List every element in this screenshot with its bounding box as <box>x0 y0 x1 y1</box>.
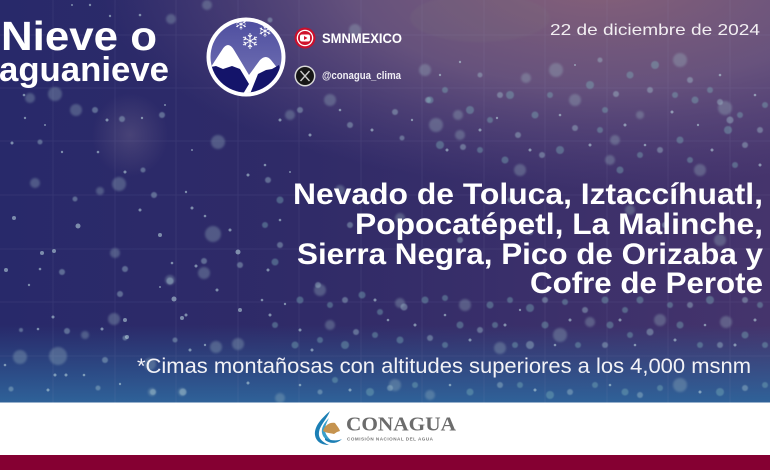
title: Nieve o <box>1 13 157 59</box>
social label: SMNMEXICO: SMNMEXICO <box>322 30 402 46</box>
footnote: *Cimas montañosas con altitudes superiores a los 4,000 msnm <box>137 355 751 378</box>
logo wordmark: CONAGUA: CONAGUA <box>346 414 457 436</box>
footer maroon band <box>0 455 770 470</box>
heading: mountain peaks: Sierra Negra, Pico de Orizaba y <box>297 238 764 271</box>
heading: mountain peaks <box>293 178 764 300</box>
snow: teal flakes on the right half <box>262 61 768 399</box>
icon: snowy mountain badge <box>206 18 286 96</box>
logo subtitle: COMISIÓN NACIONAL DEL AGUA <box>347 434 434 442</box>
icon: CONAGUA emblem <box>315 411 342 445</box>
snow: medium flakes <box>8 18 763 398</box>
heading: mountain peaks: Nevado de Toluca, Iztaccíhuatl, <box>293 178 763 211</box>
date: 22 de diciembre de 2024 <box>550 22 760 39</box>
footer white band <box>0 402 770 455</box>
title <box>0 13 169 89</box>
social label: conagua_clima: @conagua_clima <box>322 70 402 82</box>
icon: X <box>294 66 316 86</box>
icon: YouTube <box>294 28 316 48</box>
heading: mountain peaks: Cofre de Perote <box>530 267 763 300</box>
title: aguanieve <box>0 51 169 89</box>
heading: mountain peaks: Popocatépetl, La Malinche, <box>355 208 763 241</box>
